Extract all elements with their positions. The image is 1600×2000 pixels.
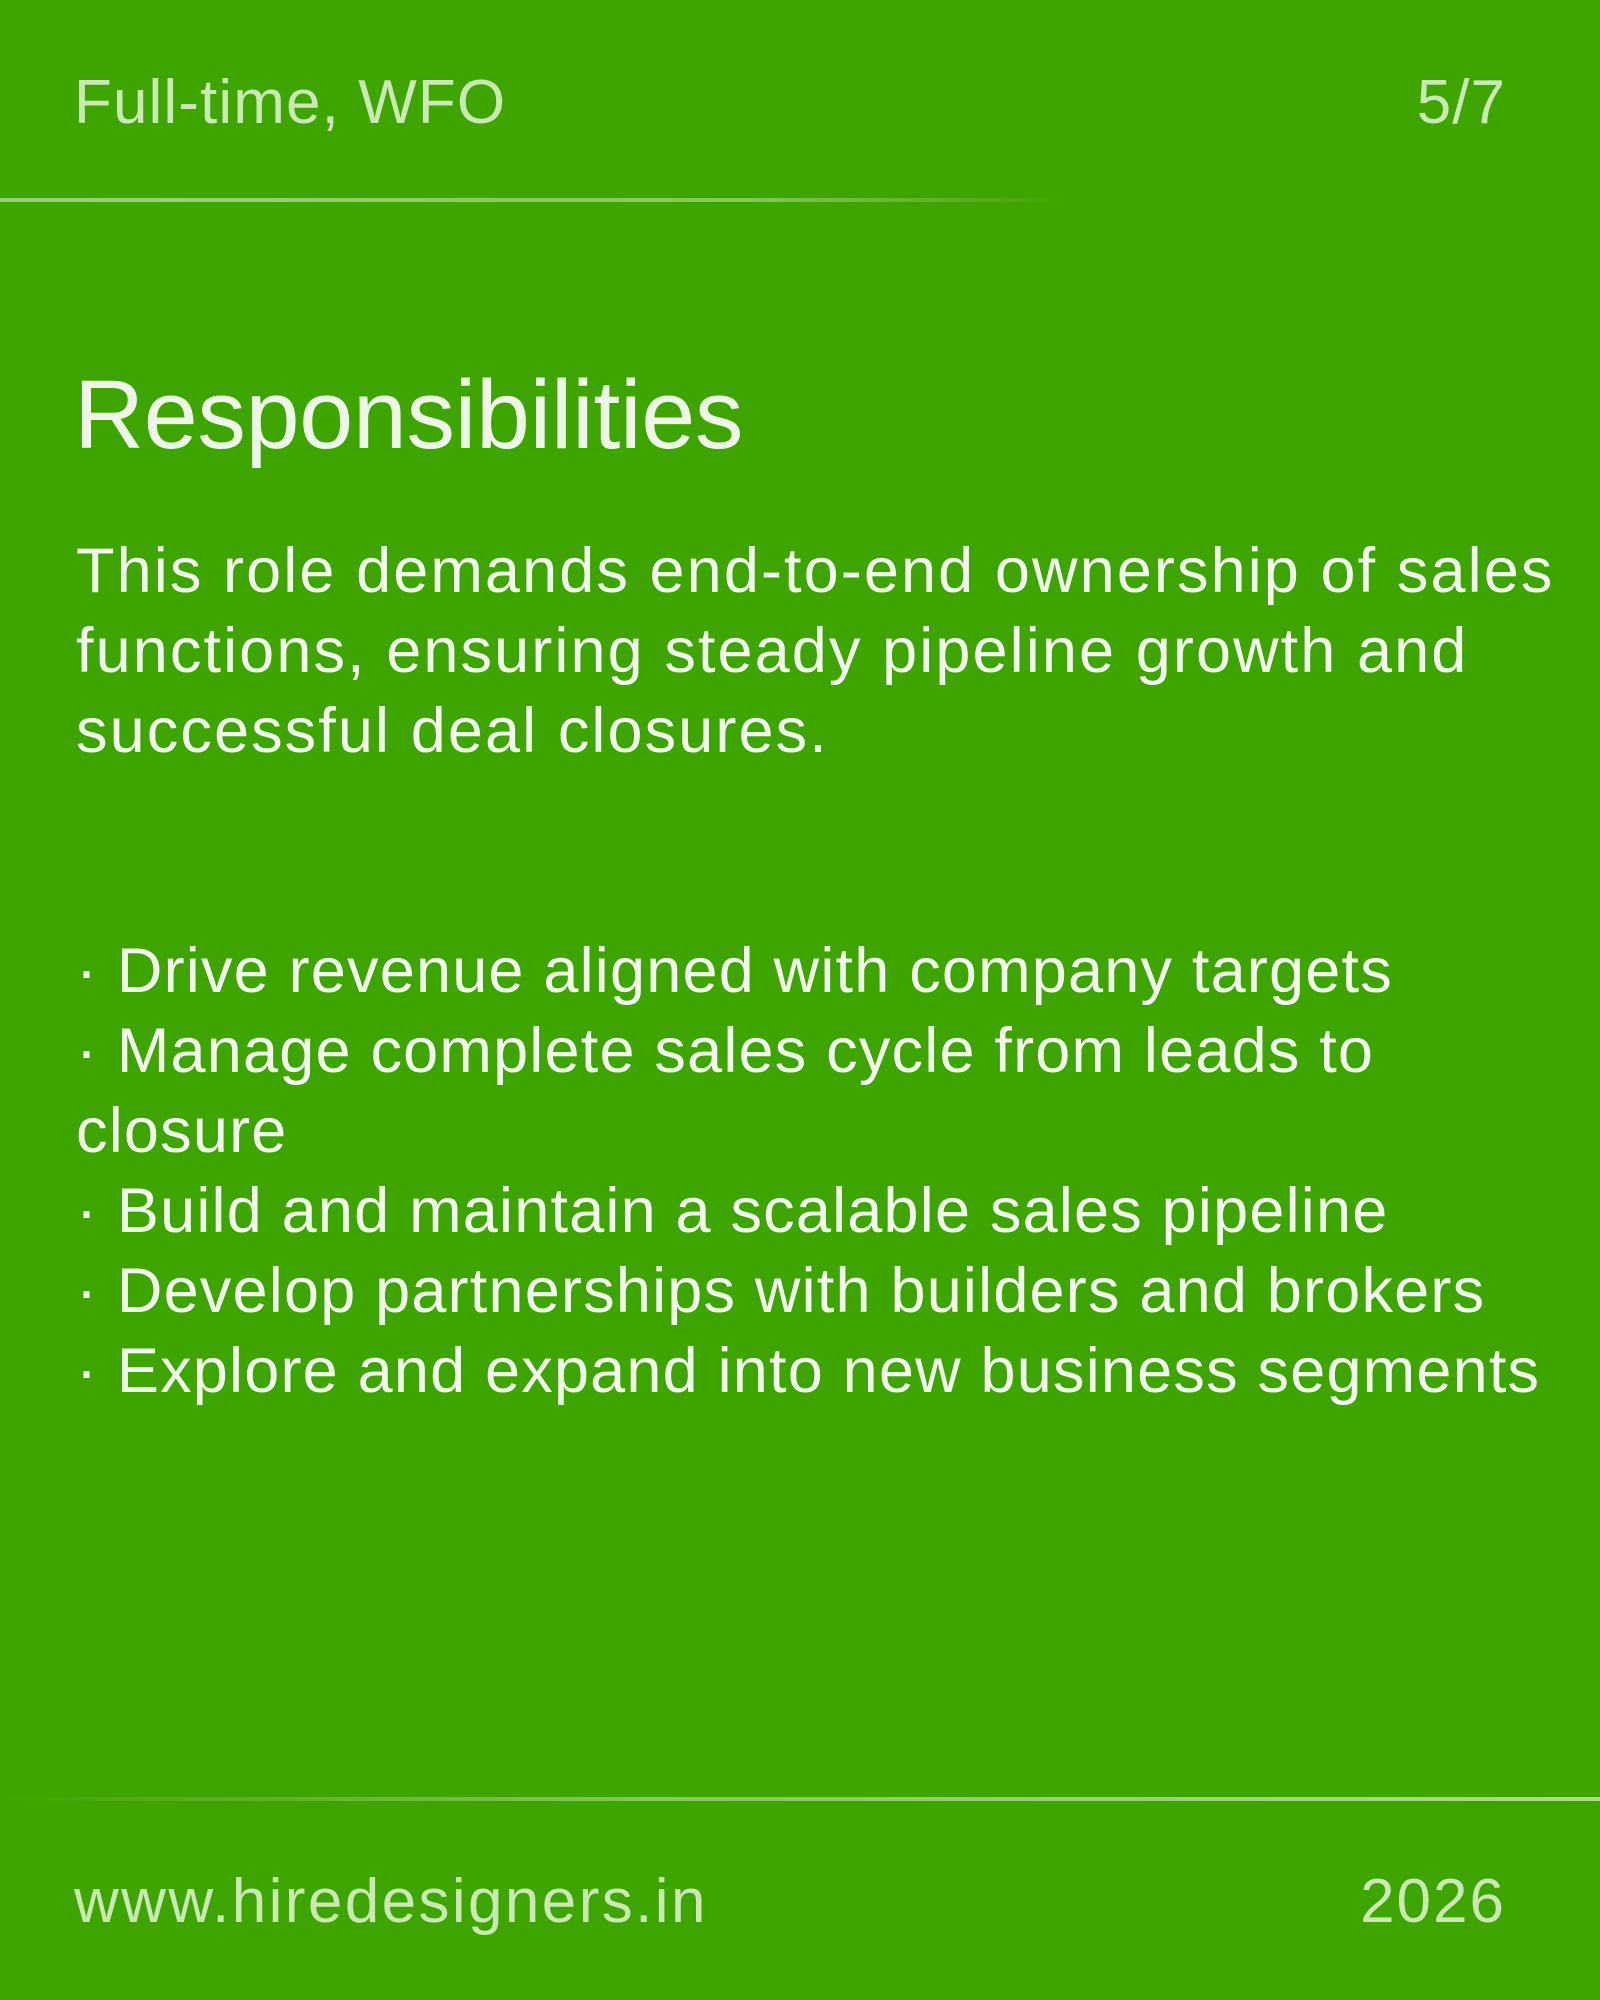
bullet list: · Manage complete sales cycle from leads to — [76, 1016, 1374, 1086]
title: Responsibilities — [74, 360, 743, 469]
footer: year: 2026 — [1360, 1867, 1506, 1936]
header: page number: 5/7 — [1417, 68, 1506, 137]
bullet list: · Build and maintain a scalable sales pipeline — [76, 1176, 1388, 1246]
intro paragraph: This role demands end-to-end ownership of sales — [76, 536, 1554, 606]
top divider line — [0, 198, 1070, 202]
bullet list: closure — [76, 1096, 288, 1166]
bullet list: · Drive revenue aligned with company targets — [76, 936, 1393, 1006]
bottom divider line — [0, 1797, 1600, 1801]
intro paragraph: successful deal closures. — [76, 696, 829, 766]
bullet list: · Explore and expand into new business segments — [76, 1336, 1540, 1406]
header: employment type: Full-time, WFO — [74, 68, 506, 137]
footer: website: www.hiredesigners.in — [74, 1867, 708, 1936]
bullet list: · Develop partnerships with builders and brokers — [76, 1256, 1485, 1326]
intro paragraph — [76, 536, 1554, 766]
intro paragraph: functions, ensuring steady pipeline growth and — [76, 616, 1468, 686]
bullet list — [76, 936, 1540, 1406]
